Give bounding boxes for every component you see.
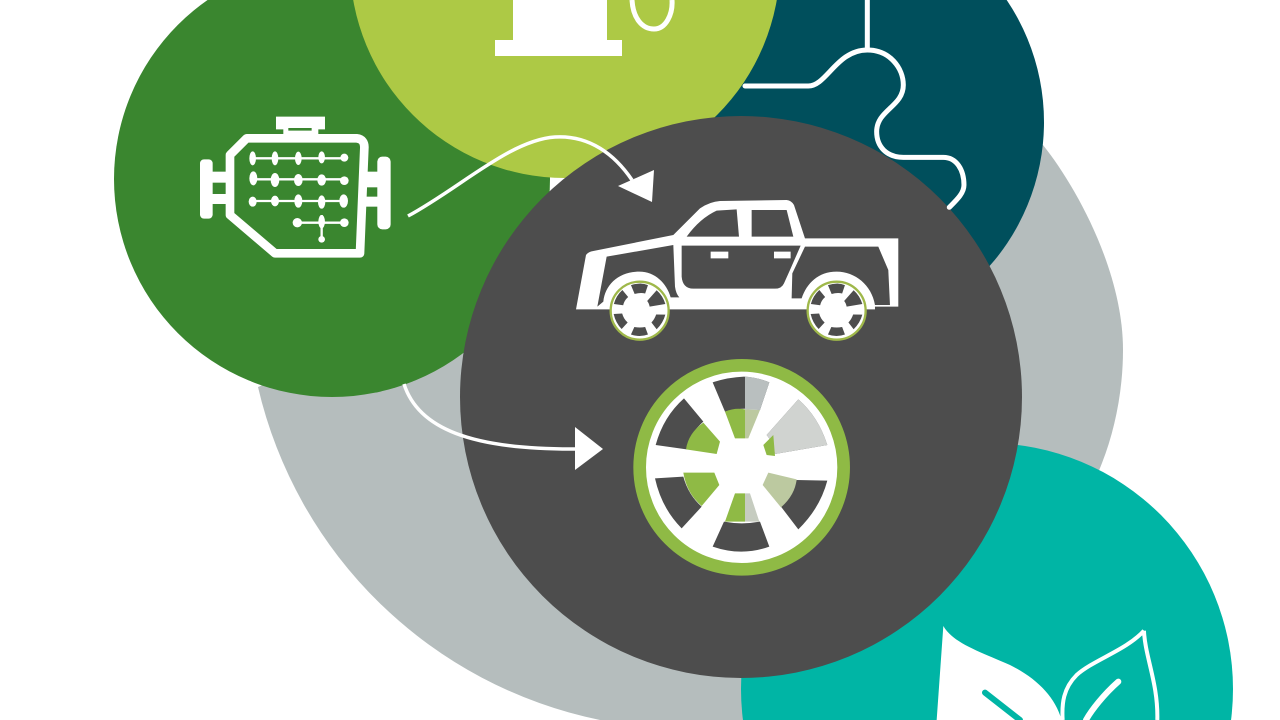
icon: leaves [937, 626, 1157, 720]
sub-icon: front wheel [611, 282, 669, 340]
green circle [114, 0, 550, 397]
sub-icon: rear wheel [808, 282, 866, 340]
icon: pickup truck [576, 200, 898, 340]
dark grey circle [460, 116, 1022, 678]
lime circle [350, 0, 780, 178]
icon: engine [200, 117, 391, 253]
hub segments [683, 409, 775, 522]
icon: large wheel [640, 365, 844, 569]
background grey shape [258, 145, 1123, 720]
icon: circuit line [745, 0, 964, 207]
dark teal circle [608, 0, 1044, 340]
light overlay sector: upper right [767, 399, 827, 454]
light overlay sector: top [745, 377, 769, 410]
arrow: engine to truck [408, 137, 654, 216]
arrow: engine to wheel [404, 384, 603, 470]
pale hub segments [745, 409, 797, 522]
icon: fuel pump [495, 0, 672, 56]
teal circle [741, 443, 1233, 720]
